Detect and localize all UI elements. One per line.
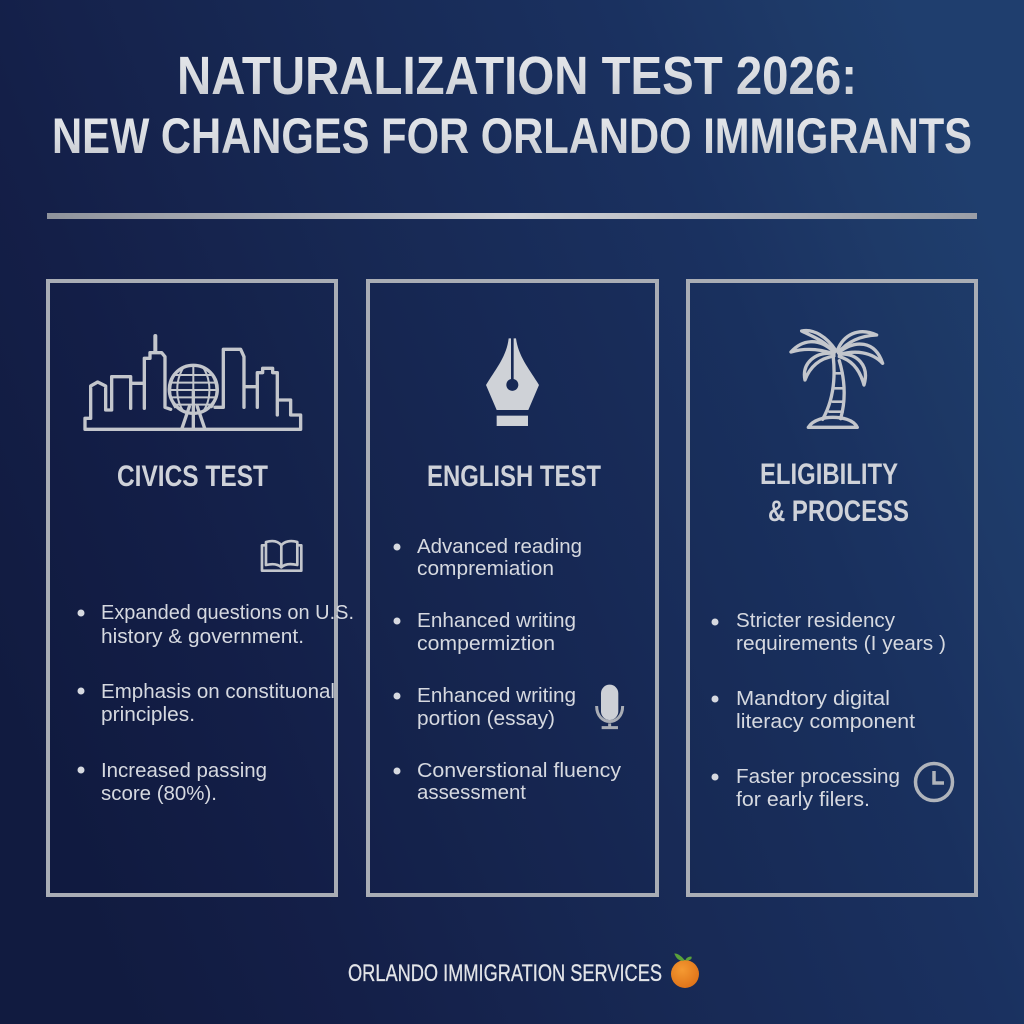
heading: english test: ENGLISH TEST xyxy=(427,460,601,493)
bullet list: english: portion (essay) xyxy=(417,707,555,730)
icon: fountain pen nib xyxy=(486,338,539,426)
bullet list: english: Advanced reading xyxy=(417,535,582,558)
bullet list: civics: score (80%). xyxy=(101,782,217,805)
bullet list: english xyxy=(394,535,622,804)
heading: eligibility and process: & PROCESS xyxy=(768,495,909,528)
icon: orange xyxy=(671,954,699,988)
bullet list: eligibility xyxy=(712,609,946,811)
title divider rule xyxy=(47,213,977,219)
bullet list: eligibility: literacy component xyxy=(736,710,915,733)
panel: eligibility and process xyxy=(688,281,976,895)
bullet list: english: assessment xyxy=(417,781,526,804)
bullet list: english: Converstional fluency xyxy=(417,759,622,782)
icon: microphone xyxy=(597,685,623,728)
bullet list: eligibility: Stricter residency xyxy=(736,609,896,632)
panel: english test xyxy=(368,281,657,895)
heading: eligibility and process xyxy=(760,458,909,528)
bullet list: english: Enhanced writing xyxy=(417,684,576,707)
bullet list: civics: history & government. xyxy=(101,625,304,648)
bullet list: civics: Increased passing xyxy=(101,759,267,782)
bullet list: eligibility: Faster processing xyxy=(736,765,900,788)
icon: clock xyxy=(916,764,952,800)
bullet list: civics xyxy=(78,601,354,805)
bullet list: english: compremiation xyxy=(417,557,554,580)
footer brand: ORLANDO IMMIGRATION SERVICES xyxy=(348,960,662,987)
bullet list: eligibility: requirements (I years ) xyxy=(736,632,946,655)
bullet list: eligibility: Mandtory digital xyxy=(736,687,890,710)
bullet list: english: compermiztion xyxy=(417,632,555,655)
icon: orlando skyline with globe xyxy=(85,336,301,429)
heading: civics test: CIVICS TEST xyxy=(117,460,268,493)
footer brand xyxy=(348,954,699,988)
bullet list: civics: Expanded questions on U.S. xyxy=(101,601,354,624)
bullet list: civics: Emphasis on constituonal xyxy=(101,680,335,703)
title xyxy=(52,46,972,164)
panel: civics test xyxy=(48,281,354,895)
heading: eligibility and process: ELIGIBILITY xyxy=(760,458,898,491)
title: NATURALIZATION TEST 2026: xyxy=(177,46,857,106)
icon: open book xyxy=(262,541,301,571)
bullet list: english: Enhanced writing xyxy=(417,609,576,632)
bullet list: eligibility: for early filers. xyxy=(736,788,870,811)
icon: palm tree xyxy=(791,331,883,427)
bullet list: civics: principles. xyxy=(101,703,195,726)
